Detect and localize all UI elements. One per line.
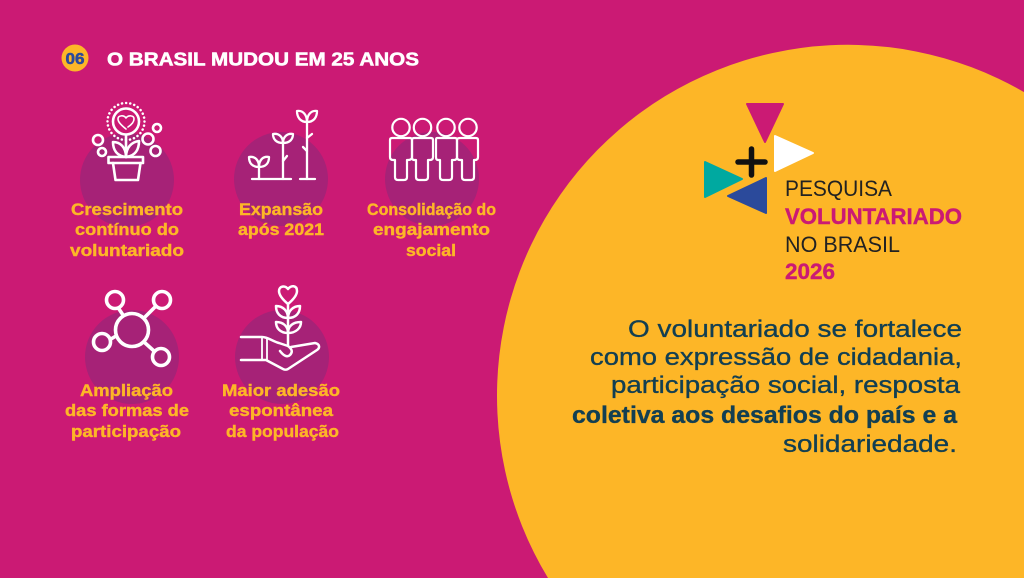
label: Maior adesão — [222, 382, 340, 400]
logo wordmark: 2026 — [785, 259, 835, 284]
icon: hand holding plant — [241, 286, 319, 370]
label: Ampliação — [80, 382, 173, 400]
logo wordmark: PESQUISA — [785, 176, 892, 201]
section number badge: 06 — [66, 51, 85, 68]
icon: network nodes — [94, 292, 170, 366]
label: Crescimento — [71, 201, 183, 219]
logo triangles and plus — [705, 104, 813, 213]
label: espontânea — [229, 402, 334, 420]
item: maior adesão espontânea — [222, 286, 340, 441]
label — [238, 201, 324, 239]
label — [367, 201, 496, 260]
logo wordmark — [785, 176, 962, 284]
label: voluntariado — [70, 242, 184, 260]
label: Consolidação do — [367, 201, 496, 219]
item: crescimento contínuo — [70, 103, 184, 260]
body statement: solidariedade. — [783, 431, 957, 458]
icon: four people — [390, 119, 478, 180]
body statement: como expressão de cidadania, — [590, 344, 962, 371]
body statement — [572, 316, 962, 458]
body statement: coletiva aos desafios do país e a — [572, 402, 957, 429]
section number badge — [62, 44, 88, 72]
label — [65, 382, 189, 441]
body statement: participação social, resposta — [611, 372, 960, 399]
item: ampliação das formas — [65, 292, 189, 441]
label: social — [406, 242, 456, 260]
label: engajamento — [373, 221, 490, 239]
label: após 2021 — [238, 221, 324, 239]
body statement: O voluntariado se fortalece — [628, 316, 962, 343]
item: consolidação do engajamento — [367, 119, 496, 260]
label: da população — [226, 423, 339, 441]
label — [222, 382, 340, 441]
label: contínuo do — [75, 221, 179, 239]
label — [70, 201, 184, 260]
logo wordmark: VOLUNTARIADO — [785, 204, 962, 229]
label: participação — [71, 423, 181, 441]
logo wordmark: NO BRASIL — [785, 232, 900, 257]
item: expansão após 2021 — [234, 111, 328, 239]
yellow circle panel — [497, 45, 1024, 578]
icon: growing sprouts — [249, 111, 317, 179]
label: Expansão — [239, 201, 323, 219]
title: O BRASIL MUDOU EM 25 ANOS — [107, 48, 419, 70]
logo: Pesquisa Voluntariado no Brasil 2026 — [705, 104, 962, 284]
icon: flower in pot — [93, 103, 161, 180]
label: das formas de — [65, 402, 189, 420]
